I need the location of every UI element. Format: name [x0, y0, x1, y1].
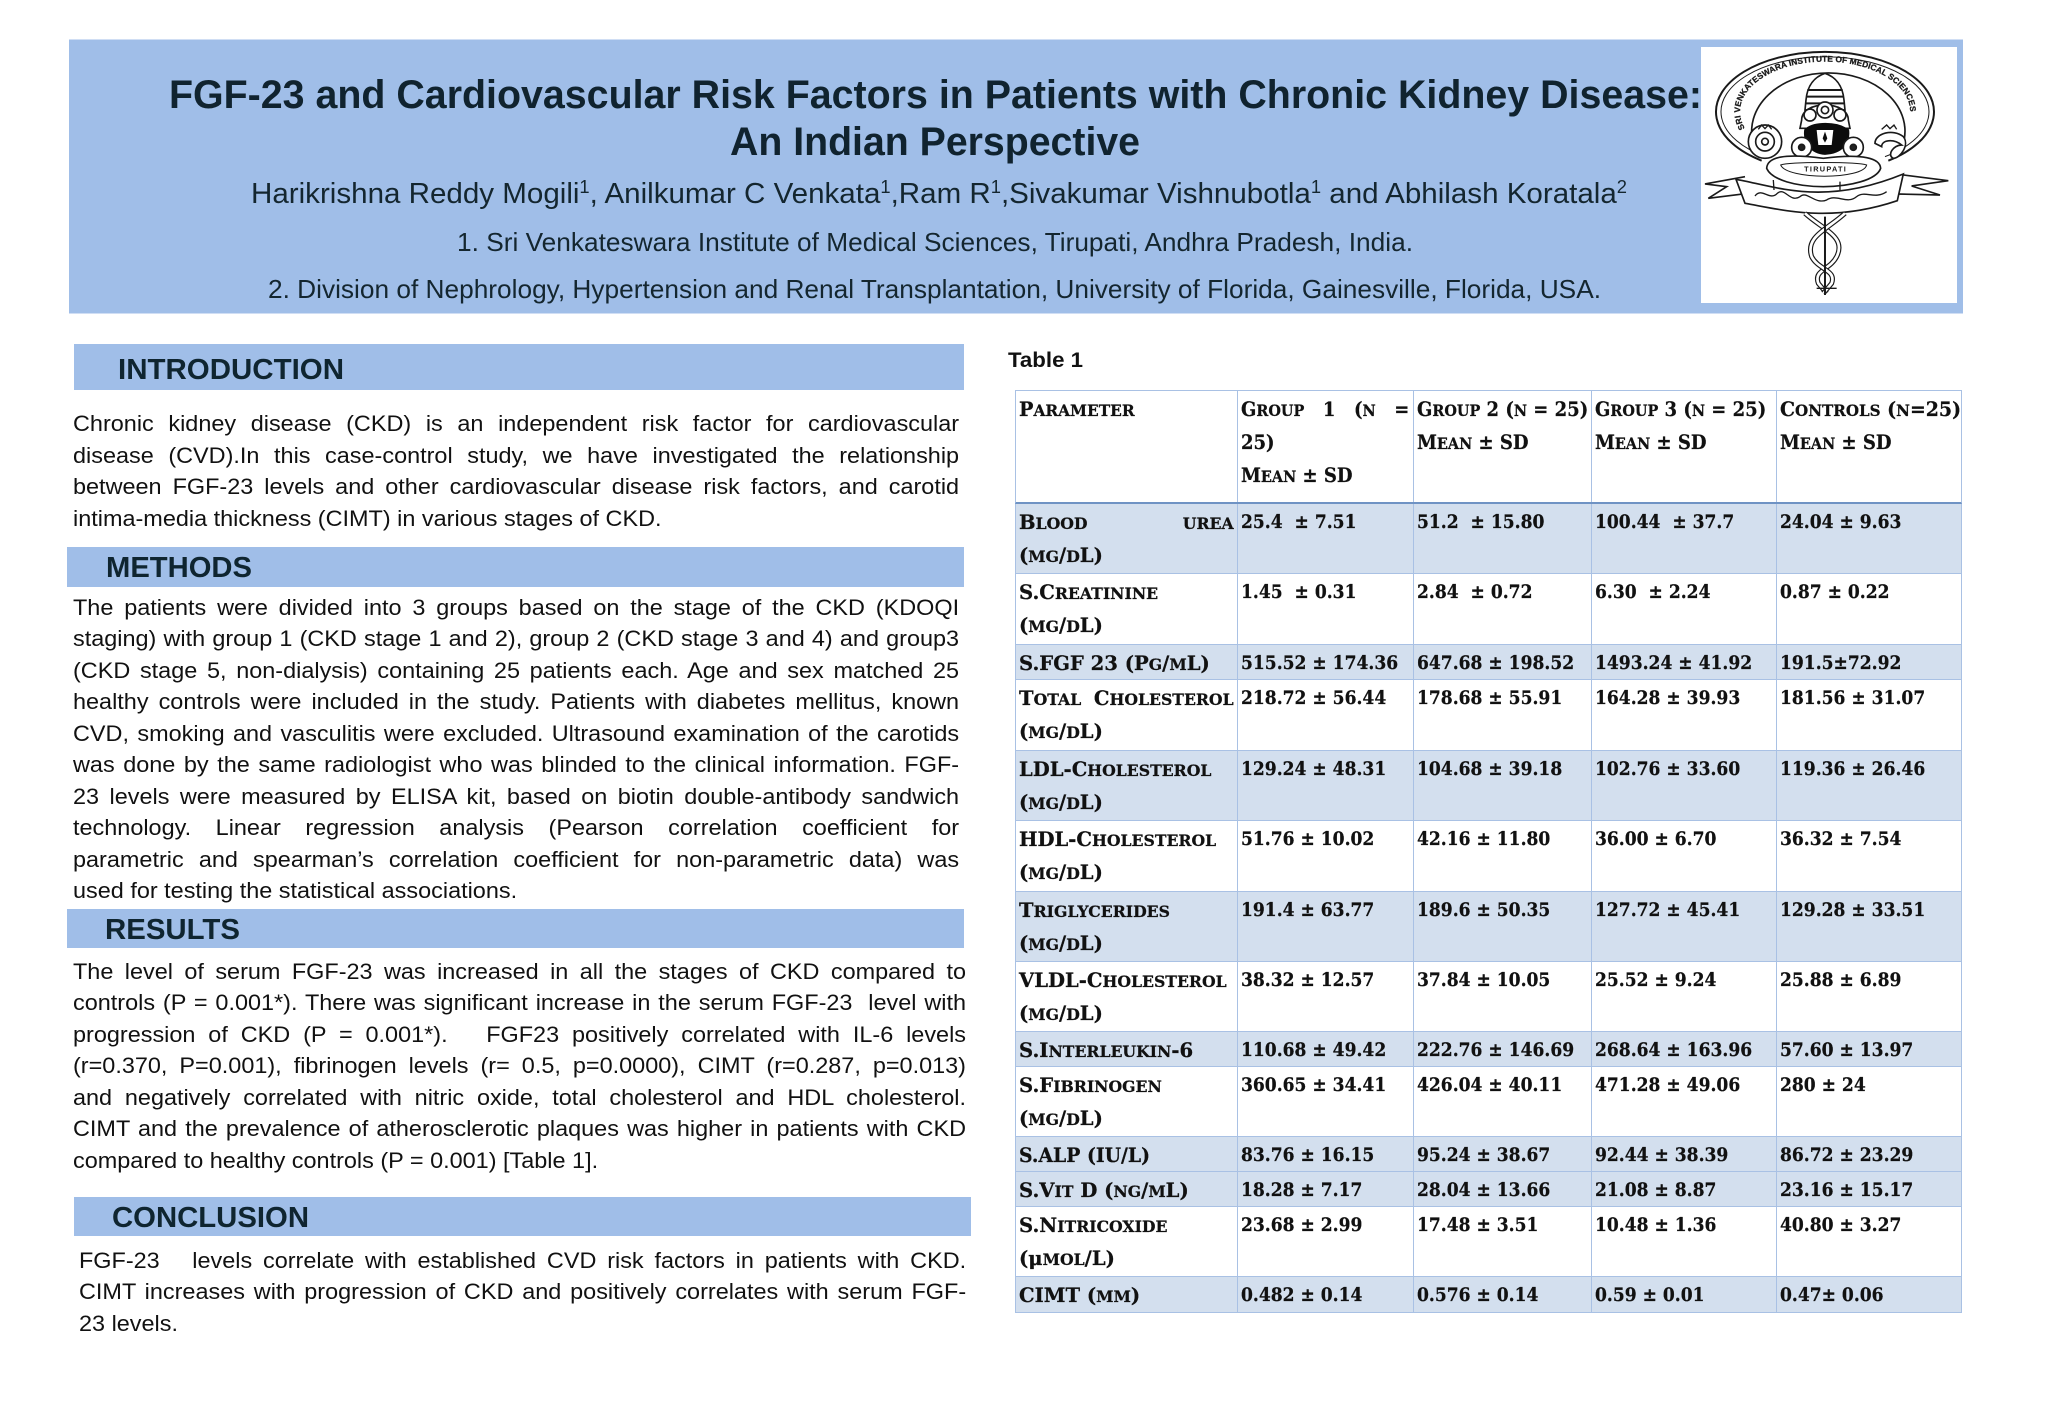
text block: results: The level of serum FGF-23 was increased in all the stages of CKD compared to	[73, 959, 966, 984]
icon: institute logo	[1701, 47, 1957, 303]
row: LDL: 119.36 ± 26.46	[1780, 758, 1925, 780]
text block: results: controls (P = 0.001*). There was significant increase in the serum FGF-23 level with	[73, 990, 966, 1015]
row: creatinine: 1.45 ± 0.31	[1241, 581, 1356, 603]
row: LDL: LDL-CHOLESTEROL	[1019, 757, 1211, 781]
crown	[1800, 73, 1850, 128]
text block: methods: staging) with group 1 (CKD stage 1 and 2), group 2 (CKD stage 3 and 4) and group3	[73, 626, 959, 651]
row: creatinine: 2.84 ± 0.72	[1417, 581, 1532, 603]
row: interleukin-6: 268.64 ± 163.96	[1594, 1039, 1752, 1061]
row: blood urea: 25.4 ± 7.51	[1241, 511, 1356, 533]
row: nitric oxide: 23.68 ± 2.99	[1241, 1214, 1362, 1236]
heading: INTRODUCTION	[74, 344, 964, 390]
row: fibrinogen: 426.04 ± 40.11	[1417, 1074, 1562, 1096]
row: ALP: 86.72 ± 23.29	[1780, 1144, 1913, 1166]
heading: INTRODUCTION: INTRODUCTION	[118, 354, 344, 386]
row: triglycerides: TRIGLYCERIDES	[1019, 898, 1170, 922]
table header row: GROUP 3 (N = 25)	[1594, 397, 1766, 421]
row: blood urea: 51.2 ± 15.80	[1417, 511, 1544, 533]
row: nitric oxide: (μMOL/L)	[1019, 1246, 1115, 1270]
row: creatinine: S.CREATININE	[1019, 580, 1158, 604]
row: ALP	[1015, 1137, 1962, 1172]
row: total cholesterol: 218.72 ± 56.44	[1241, 687, 1386, 709]
row: ALP: 83.76 ± 16.15	[1241, 1144, 1374, 1166]
affiliation 2: 2. Division of Nephrology, Hypertension and Renal Transplantation, University of Florida, Gainesville, Florida, USA.	[268, 274, 1601, 304]
ribbon	[1705, 177, 1748, 198]
text block: methods: (CKD stage 5, non-dialysis) containing 25 patients each. Age and sex matched 25	[73, 658, 959, 683]
text block: methods: was done by the same radiologist who was blinded to the clinical information. FGF-	[73, 752, 959, 777]
row: nitric oxide: 40.80 ± 3.27	[1780, 1214, 1901, 1236]
table header row: 25)	[1241, 430, 1275, 454]
row: VLDL: 25.88 ± 6.89	[1780, 969, 1901, 991]
text block: methods: technology. Linear regression analysis (Pearson correlation coefficient for	[73, 815, 959, 840]
row: fibrinogen: 280 ± 24	[1780, 1074, 1865, 1096]
row: FGF 23: 1493.24 ± 41.92	[1594, 652, 1752, 674]
text block: methods: The patients were divided into 3 groups based on the stage of the CKD (KDOQI	[73, 595, 959, 620]
row: blood urea: 24.04 ± 9.63	[1780, 511, 1901, 533]
row: total cholesterol	[1015, 680, 1962, 751]
text block: methods: healthy controls were included in the study. Patients with diabetes mellitus, known	[73, 689, 959, 714]
text block: conclusion: CIMT increases with progression of CKD and positively correlates with serum FGF-	[79, 1279, 966, 1304]
caduceus	[1805, 213, 1839, 293]
row: blood urea: BLOOD UREA	[1019, 510, 1234, 534]
table header row: GROUP 1 (N =	[1241, 397, 1409, 421]
row: vitamin D: S.VIT D (NG/ML)	[1019, 1178, 1189, 1202]
row: VLDL: (MG/DL)	[1019, 1001, 1103, 1025]
heading: METHODS: METHODS	[106, 552, 252, 584]
row: CIMT: 0.576 ± 0.14	[1417, 1284, 1538, 1306]
text block: introduction: between FGF-23 levels and other cardiovascular disease risk factors, and carotid	[73, 474, 959, 499]
table header row: GROUP 2 (N = 25)	[1417, 397, 1588, 421]
row: triglycerides: 189.6 ± 50.35	[1417, 899, 1550, 921]
authors: ,Ram R	[891, 178, 991, 210]
row: interleukin-6: 57.60 ± 13.97	[1780, 1039, 1913, 1061]
row: vitamin D: 23.16 ± 15.17	[1780, 1179, 1913, 1201]
authors: ,Sivakumar Vishnubotla	[1001, 178, 1312, 210]
table header row: MEAN ± SD	[1417, 430, 1528, 454]
row: CIMT: 0.47± 0.06	[1780, 1284, 1883, 1306]
row: total cholesterol: 181.56 ± 31.07	[1780, 687, 1925, 709]
row: VLDL: 37.84 ± 10.05	[1417, 969, 1550, 991]
row: interleukin-6	[1015, 1032, 1962, 1067]
row: FGF 23: 515.52 ± 174.36	[1241, 652, 1398, 674]
text block: methods	[73, 595, 959, 903]
row: HDL: (MG/DL)	[1019, 860, 1103, 884]
row: vitamin D: 18.28 ± 7.17	[1241, 1179, 1362, 1201]
row: nitric oxide: 10.48 ± 1.36	[1594, 1214, 1716, 1236]
table header row: MEAN ± SD	[1780, 430, 1891, 454]
text block: results: CIMT and the prevalence of atherosclerotic plaques was higher in patients with CKD	[73, 1116, 966, 1141]
table caption: Table 1	[1008, 349, 1083, 372]
row: triglycerides: 127.72 ± 45.41	[1594, 899, 1740, 921]
text block: methods: used for testing the statistical associations.	[73, 878, 517, 903]
row: total cholesterol: 164.28 ± 39.93	[1594, 687, 1740, 709]
row: VLDL: 25.52 ± 9.24	[1594, 969, 1716, 991]
title: An Indian Perspective	[730, 120, 1140, 164]
row: CIMT: 0.59 ± 0.01	[1594, 1284, 1704, 1306]
row: total cholesterol: 178.68 ± 55.91	[1417, 687, 1562, 709]
data table	[1015, 390, 1962, 1313]
row: VLDL: VLDL-CHOLESTEROL	[1019, 968, 1227, 992]
authors: 1	[991, 177, 1001, 197]
text block: introduction: Chronic kidney disease (CKD) is an independent risk factor for cardiovascular	[73, 411, 959, 436]
row: creatinine: 0.87 ± 0.22	[1780, 581, 1889, 603]
row: triglycerides: 191.4 ± 63.77	[1241, 899, 1374, 921]
heading: RESULTS	[67, 909, 964, 948]
shield	[1767, 156, 1881, 187]
table header row: MEAN ± SD	[1594, 430, 1706, 454]
authors: 1	[880, 177, 891, 197]
row: triglycerides: 129.28 ± 33.51	[1780, 899, 1925, 921]
row: vitamin D	[1015, 1172, 1962, 1207]
row: triglycerides	[1015, 892, 1962, 962]
row: LDL: 129.24 ± 48.31	[1241, 758, 1386, 780]
text block: results	[73, 959, 966, 1173]
authors: 1	[1311, 177, 1321, 197]
row: blood urea	[1015, 504, 1962, 574]
row: vitamin D: 28.04 ± 13.66	[1417, 1179, 1550, 1201]
heading: CONCLUSION: CONCLUSION	[112, 1202, 309, 1234]
authors: Harikrishna Reddy Mogili	[251, 178, 573, 210]
title	[169, 73, 1702, 164]
row: blood urea: 100.44 ± 37.7	[1594, 511, 1734, 533]
text block: introduction	[73, 411, 959, 530]
row: CIMT: CIMT (MM)	[1019, 1283, 1140, 1307]
row: nitric oxide: 17.48 ± 3.51	[1417, 1214, 1538, 1236]
row: creatinine: (MG/DL)	[1019, 613, 1103, 637]
text block: methods: parametric and spearman’s correlation coefficient for non-parametric data) was	[73, 847, 959, 872]
row: CIMT: 0.482 ± 0.14	[1241, 1284, 1362, 1306]
table header row: CONTROLS (N=25)	[1780, 397, 1961, 421]
row: HDL: 42.16 ± 11.80	[1417, 828, 1550, 850]
table header row	[1015, 390, 1962, 504]
text block: introduction: intima-media thickness (CIMT) in various stages of CKD.	[73, 506, 662, 530]
row: FGF 23: 647.68 ± 198.52	[1417, 652, 1574, 674]
heading: RESULTS: RESULTS	[105, 914, 240, 946]
row: HDL: 51.76 ± 10.02	[1241, 828, 1374, 850]
row: interleukin-6: S.INTERLEUKIN-6	[1019, 1038, 1193, 1062]
row: HDL: 36.00 ± 6.70	[1594, 828, 1716, 850]
authors: 2	[1617, 177, 1627, 197]
row: triglycerides: (MG/DL)	[1019, 931, 1103, 955]
icon: institute logo: TIRUPATI	[1804, 164, 1846, 173]
row: FGF 23: 191.5±72.92	[1780, 652, 1901, 674]
row: HDL: HDL-CHOLESTEROL	[1019, 827, 1216, 851]
row: ALP: S.ALP (IU/L)	[1019, 1143, 1150, 1167]
title: FGF-23 and Cardiovascular Risk Factors in Patients with Chronic Kidney Disease:	[169, 73, 1702, 117]
row: LDL: 102.76 ± 33.60	[1594, 758, 1740, 780]
row: creatinine	[1015, 574, 1962, 645]
row: VLDL: 38.32 ± 12.57	[1241, 969, 1374, 991]
text block: results: compared to healthy controls (P = 0.001) [Table 1].	[73, 1148, 598, 1173]
row: fibrinogen: S.FIBRINOGEN	[1019, 1073, 1162, 1097]
table header row: PARAMETER	[1019, 397, 1135, 421]
row: HDL: 36.32 ± 7.54	[1780, 828, 1901, 850]
row: nitric oxide: S.NITRICOXIDE	[1019, 1213, 1167, 1237]
row: nitric oxide	[1015, 1207, 1962, 1277]
row: interleukin-6: 110.68 ± 49.42	[1241, 1039, 1386, 1061]
text block: conclusion: FGF-23 levels correlate with established CVD risk factors in patients with CKD.	[79, 1248, 966, 1273]
row: blood urea: (MG/DL)	[1019, 543, 1103, 567]
row: VLDL	[1015, 962, 1962, 1032]
row: FGF 23: S.FGF 23 (PG/ML)	[1019, 651, 1210, 675]
row: interleukin-6: 222.76 ± 146.69	[1417, 1039, 1574, 1061]
row: LDL: 104.68 ± 39.18	[1417, 758, 1562, 780]
table header row: MEAN ± SD	[1241, 463, 1352, 487]
row: creatinine: 6.30 ± 2.24	[1594, 581, 1710, 603]
row: vitamin D: 21.08 ± 8.87	[1594, 1179, 1716, 1201]
discs	[1748, 125, 1906, 158]
icon: institute logo: SRI VENKATESWARA INSTITUTE OF MEDICAL SCIENCES	[1734, 56, 1916, 130]
row: total cholesterol: (MG/DL)	[1019, 719, 1103, 743]
text block: conclusion: 23 levels.	[79, 1311, 178, 1336]
row: ALP: 95.24 ± 38.67	[1417, 1144, 1550, 1166]
row: total cholesterol: TOTAL CHOLESTEROL	[1019, 686, 1234, 710]
heading: METHODS	[67, 547, 964, 587]
text block: results: progression of CKD (P = 0.001*). FGF23 positively correlated with IL-6 levels	[73, 1022, 966, 1047]
row: CIMT	[1015, 1277, 1962, 1313]
authors: and Abhilash Koratala	[1321, 178, 1618, 210]
text block: introduction: disease (CVD).In this case-control study, we have investigated the relationship	[73, 442, 959, 468]
row: LDL	[1015, 751, 1962, 821]
row: HDL	[1015, 821, 1962, 892]
text block: results: and negatively correlated with nitric oxide, total cholesterol and HDL cholesterol.	[73, 1085, 966, 1110]
authors: , Anilkumar C Venkata	[590, 178, 881, 210]
affiliation 1: 1. Sri Venkateswara Institute of Medical Sciences, Tirupati, Andhra Pradesh, India.	[457, 227, 1413, 257]
row: fibrinogen: (MG/DL)	[1019, 1106, 1103, 1130]
text block: conclusion	[79, 1248, 966, 1336]
row: LDL: (MG/DL)	[1019, 790, 1103, 814]
text block: methods: CVD, smoking and vasculitis were excluded. Ultrasound examination of the carotids	[73, 721, 959, 746]
row: fibrinogen: 471.28 ± 49.06	[1594, 1074, 1740, 1096]
authors: 1	[579, 177, 590, 197]
row: FGF 23	[1015, 645, 1962, 680]
face	[1805, 124, 1849, 154]
row: fibrinogen	[1015, 1067, 1962, 1137]
text block: results: (r=0.370, P=0.001), fibrinogen levels (r= 0.5, p=0.0000), CIMT (r=0.287, p=0.013)	[73, 1053, 966, 1078]
row: fibrinogen: 360.65 ± 34.41	[1241, 1074, 1386, 1096]
row: ALP: 92.44 ± 38.39	[1594, 1144, 1728, 1166]
heading: CONCLUSION	[74, 1197, 971, 1236]
header banner	[69, 40, 1963, 314]
text block: methods: 23 levels were measured by ELISA kit, based on biotin double-antibody sandwich	[73, 784, 959, 809]
